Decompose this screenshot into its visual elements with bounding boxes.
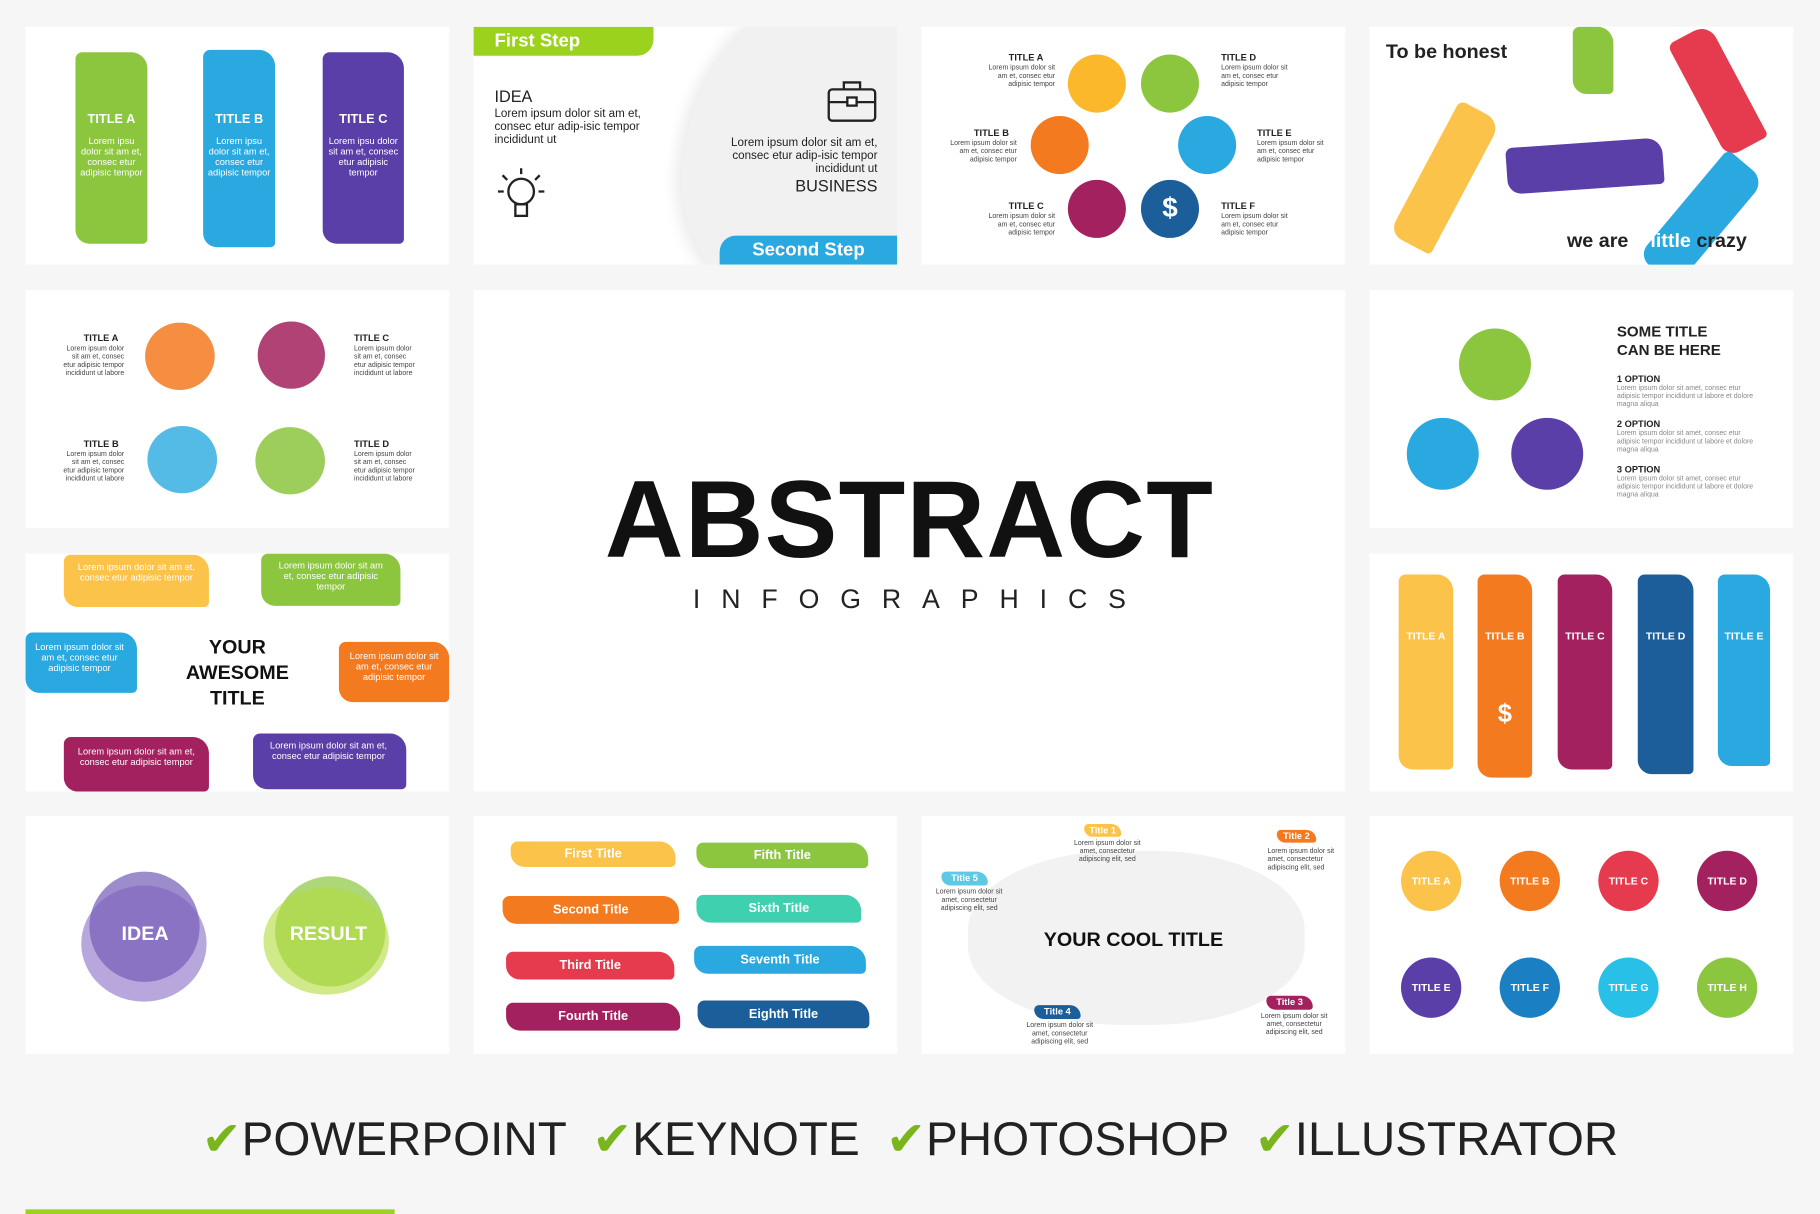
- text: idea: Lorem ipsum dolor sit am et, consec etur adip-isic tempor incididunt ut: [494, 108, 641, 146]
- text: idea: IDEA: [494, 87, 532, 106]
- panel: five vertical strokes: TITLE E: [1725, 630, 1763, 642]
- panel: your awesome title: Lorem ipsum dolor sit am et, consec etur adipisic tempor: [350, 651, 438, 682]
- panel: five vertical strokes: [1370, 554, 1793, 792]
- panel: five vertical strokes: TITLE B: [1485, 630, 1525, 642]
- panel: your cool title: Title 3: [1276, 997, 1303, 1007]
- panel: six hexagon icons: Lorem ipsum dolor sit am et, consec etur adipisic tempor: [1221, 65, 1288, 88]
- panel: your awesome title: Lorem ipsum dolor sit am et, consec etur adipisic tempor: [279, 561, 383, 592]
- tab: first step: [474, 27, 653, 56]
- panel: four blob icons: [26, 290, 449, 528]
- text: business: BUSINESS: [795, 176, 877, 195]
- title: ABSTRACT: ABSTRACT: [605, 458, 1214, 580]
- panel: four blob icons: Lorem ipsum dolor sit am et, consec etur adipisic tempor incididunt ut labore: [63, 346, 124, 377]
- panel: your awesome title: Lorem ipsum dolor sit am et, consec etur adipisic tempor: [78, 562, 195, 583]
- panel: six hexagon icons: Lorem ipsum dolor sit am et, consec etur adipisic tempor: [989, 65, 1055, 88]
- panel: eight horizontal strokes: Fifth Title: [754, 848, 811, 862]
- panel: eight circles: TITLE H: [1707, 982, 1747, 993]
- subtitle: infographics: INFOGRAPHICS: [693, 584, 1147, 614]
- stroke: title A: Lorem ipsu dolor sit am et, consec etur adipisic tempor: [80, 136, 143, 178]
- panel: six hexagon icons: TITLE B: [974, 128, 1009, 138]
- stroke: title A: [75, 52, 147, 244]
- panel: six hexagon icons: Lorem ipsum dolor sit am et, consec etur adipisic tempor: [989, 214, 1055, 237]
- stroke: title C: Lorem ipsu dolor sit am et, consec etur adipisic tempor: [328, 136, 398, 178]
- panel: eight circles: [1370, 816, 1793, 1054]
- panel: four blob icons: Lorem ipsum dolor sit am et, consec etur adipisic tempor incididunt ut labore: [354, 346, 415, 377]
- panel: your awesome title: [26, 554, 449, 792]
- panel: eight circles: TITLE G: [1608, 982, 1648, 993]
- panel: four blob icons: TITLE C: [354, 333, 389, 344]
- panel: to be honest: To be honest: [1386, 41, 1507, 63]
- panel: eight horizontal strokes: Third Title: [559, 959, 621, 973]
- text: we are a little crazy: we are a little crazy: [1567, 230, 1747, 252]
- panel: some title flower icons: Lorem ipsum dolor sit amet, consec etur adipisic tempor incididunt ut labore et dolore magna aliqua: [1617, 431, 1753, 454]
- stroke: title B: [203, 50, 275, 247]
- software list: ✔POWERPOINT ✔KEYNOTE ✔PHOTOSHOP ✔ILLUSTRATOR: [202, 1112, 1618, 1165]
- stroke: title B: Lorem ipsu dolor sit am et, consec etur adipisic tempor: [208, 136, 270, 178]
- panel: some title flower icons: 1 OPTION: [1617, 374, 1660, 384]
- panel: your awesome title: Lorem ipsum dolor sit am et, consec etur adipisic tempor: [35, 642, 124, 673]
- panel: eight horizontal strokes: Second Title: [553, 903, 629, 917]
- panel: some title flower icons: Lorem ipsum dolor sit amet, consec etur adipisic tempor incididunt ut labore et dolore magna aliqua: [1617, 385, 1753, 409]
- panel: six hexagon icons: TITLE A: [1009, 52, 1043, 63]
- panel: eight circles: TITLE C: [1609, 875, 1648, 887]
- panel: some title flower icons: Lorem ipsum dolor sit amet, consec etur adipisic tempor incididunt ut labore et dolore magna aliqua: [1617, 476, 1753, 499]
- panel: idea result: RESULT: [290, 923, 367, 945]
- panel: six hexagon icons: Lorem ipsum dolor sit am et, consec etur adipisic tempor: [1257, 140, 1324, 164]
- panel: eight circles: TITLE B: [1510, 875, 1550, 887]
- panel: some title flower icons: 3 OPTION: [1617, 464, 1660, 475]
- panel: eight horizontal strokes: Eighth Title: [749, 1007, 818, 1021]
- panel: four blob icons: Lorem ipsum dolor sit am et, consec etur adipisic tempor incididunt ut labore: [63, 451, 124, 483]
- panel: six hexagon icons: [922, 27, 1345, 265]
- panel: some title flower icons: CAN BE HERE: [1617, 341, 1721, 359]
- panel: six hexagon icons: Lorem ipsum dolor sit am et, consec etur adipisic tempor: [1221, 214, 1288, 237]
- panel: your cool title: Title 1: [1089, 825, 1116, 836]
- panel: five vertical strokes: TITLE D: [1646, 630, 1685, 642]
- panel: your cool title: Title 4: [1044, 1006, 1071, 1017]
- panel: six hexagon icons: TITLE D: [1221, 52, 1256, 63]
- panel: center title: [474, 290, 1345, 792]
- title: your awesome title: [186, 636, 289, 709]
- panel: eight horizontal strokes: Seventh Title: [740, 953, 820, 967]
- panel: four blob icons: TITLE D: [354, 439, 389, 449]
- panel: your cool title: Lorem ipsum dolor sit amet, consectetur adipiscing elit, sed: [1261, 1013, 1327, 1036]
- panel: your cool title: Lorem ipsum dolor sit amet, consectetur adipiscing elit, sed: [1074, 840, 1141, 863]
- stroke: title A: TITLE A: [88, 113, 135, 127]
- text: idea: [494, 87, 641, 146]
- stroke: title B: TITLE B: [215, 113, 263, 127]
- panel: six hexagon icons: $: [1162, 193, 1178, 224]
- panel: five vertical strokes: $: [1498, 699, 1512, 728]
- tab: second step: Second Step: [752, 240, 865, 260]
- panel: six hexagon icons: TITLE C: [1009, 201, 1044, 211]
- stroke: title C: [323, 52, 404, 244]
- panel: eight horizontal strokes: Fourth Title: [558, 1010, 628, 1024]
- panel: your cool title: Lorem ipsum dolor sit amet, consectetur adipiscing elit, sed: [936, 889, 1002, 912]
- panel: your cool title: Lorem ipsum dolor sit amet, consectetur adipiscing elit, sed: [1026, 1022, 1093, 1046]
- title: your awesome title: TITLE: [210, 687, 265, 709]
- panel: four blob icons: TITLE B: [84, 439, 119, 449]
- panel: four blob icons: TITLE A: [84, 333, 118, 344]
- panel: six hexagon icons: TITLE F: [1221, 201, 1255, 211]
- text: business: [731, 137, 878, 195]
- panel: three vertical brush strokes: [26, 27, 449, 265]
- panel: your cool title: YOUR COOL TITLE: [1044, 928, 1223, 951]
- tab: first step: First Step: [494, 31, 580, 51]
- panel: your cool title: Title 5: [951, 873, 978, 883]
- panel: eight circles: TITLE A: [1412, 875, 1451, 887]
- title: your awesome title: YOUR: [209, 636, 266, 658]
- panel: your cool title: [922, 816, 1345, 1054]
- icon: lightbulb: [498, 168, 544, 218]
- panel: eight horizontal strokes: Sixth Title: [748, 902, 809, 916]
- panel: your awesome title: Lorem ipsum dolor sit am et, consec etur adipisic tempor: [270, 740, 387, 761]
- panel: idea result: IDEA: [122, 923, 169, 945]
- panel: your cool title: Title 2: [1283, 831, 1310, 841]
- panel: eight circles: TITLE D: [1707, 875, 1747, 887]
- panel: eight circles: TITLE E: [1412, 982, 1451, 993]
- title: your awesome title: AWESOME: [186, 662, 289, 684]
- panel: five vertical strokes: TITLE A: [1406, 630, 1445, 642]
- icon: briefcase: [828, 81, 876, 122]
- panel: six hexagon icons: Lorem ipsum dolor sit am et, consec etur adipisic tempor: [950, 140, 1017, 164]
- panel: some title flower icons: [1370, 290, 1793, 528]
- panel: your cool title: Lorem ipsum dolor sit amet, consectetur adipiscing elit, sed: [1267, 848, 1334, 872]
- panel: six hexagon icons: TITLE E: [1257, 128, 1292, 138]
- text: business: Lorem ipsum dolor sit am et, consec etur adip-isic tempor incididunt ut: [731, 137, 877, 175]
- panel: eight horizontal strokes: First Title: [565, 847, 622, 861]
- panel: idea result: [26, 816, 449, 1054]
- panel: first step / second step: [474, 27, 897, 265]
- panel: your awesome title: Lorem ipsum dolor sit am et, consec etur adipisic tempor: [78, 746, 195, 767]
- stroke: title C: TITLE C: [339, 113, 387, 127]
- panel: eight circles: TITLE F: [1511, 982, 1549, 993]
- tab: second step: [720, 236, 897, 265]
- panel: eight horizontal strokes: [474, 816, 897, 1054]
- panel: four blob icons: Lorem ipsum dolor sit am et, consec etur adipisic tempor incididunt ut labore: [354, 451, 415, 483]
- panel: five vertical strokes: TITLE C: [1565, 630, 1605, 642]
- panel: to be honest: [1370, 27, 1793, 265]
- panel: some title flower icons: 2 OPTION: [1617, 419, 1660, 429]
- panel: some title flower icons: SOME TITLE: [1617, 323, 1707, 340]
